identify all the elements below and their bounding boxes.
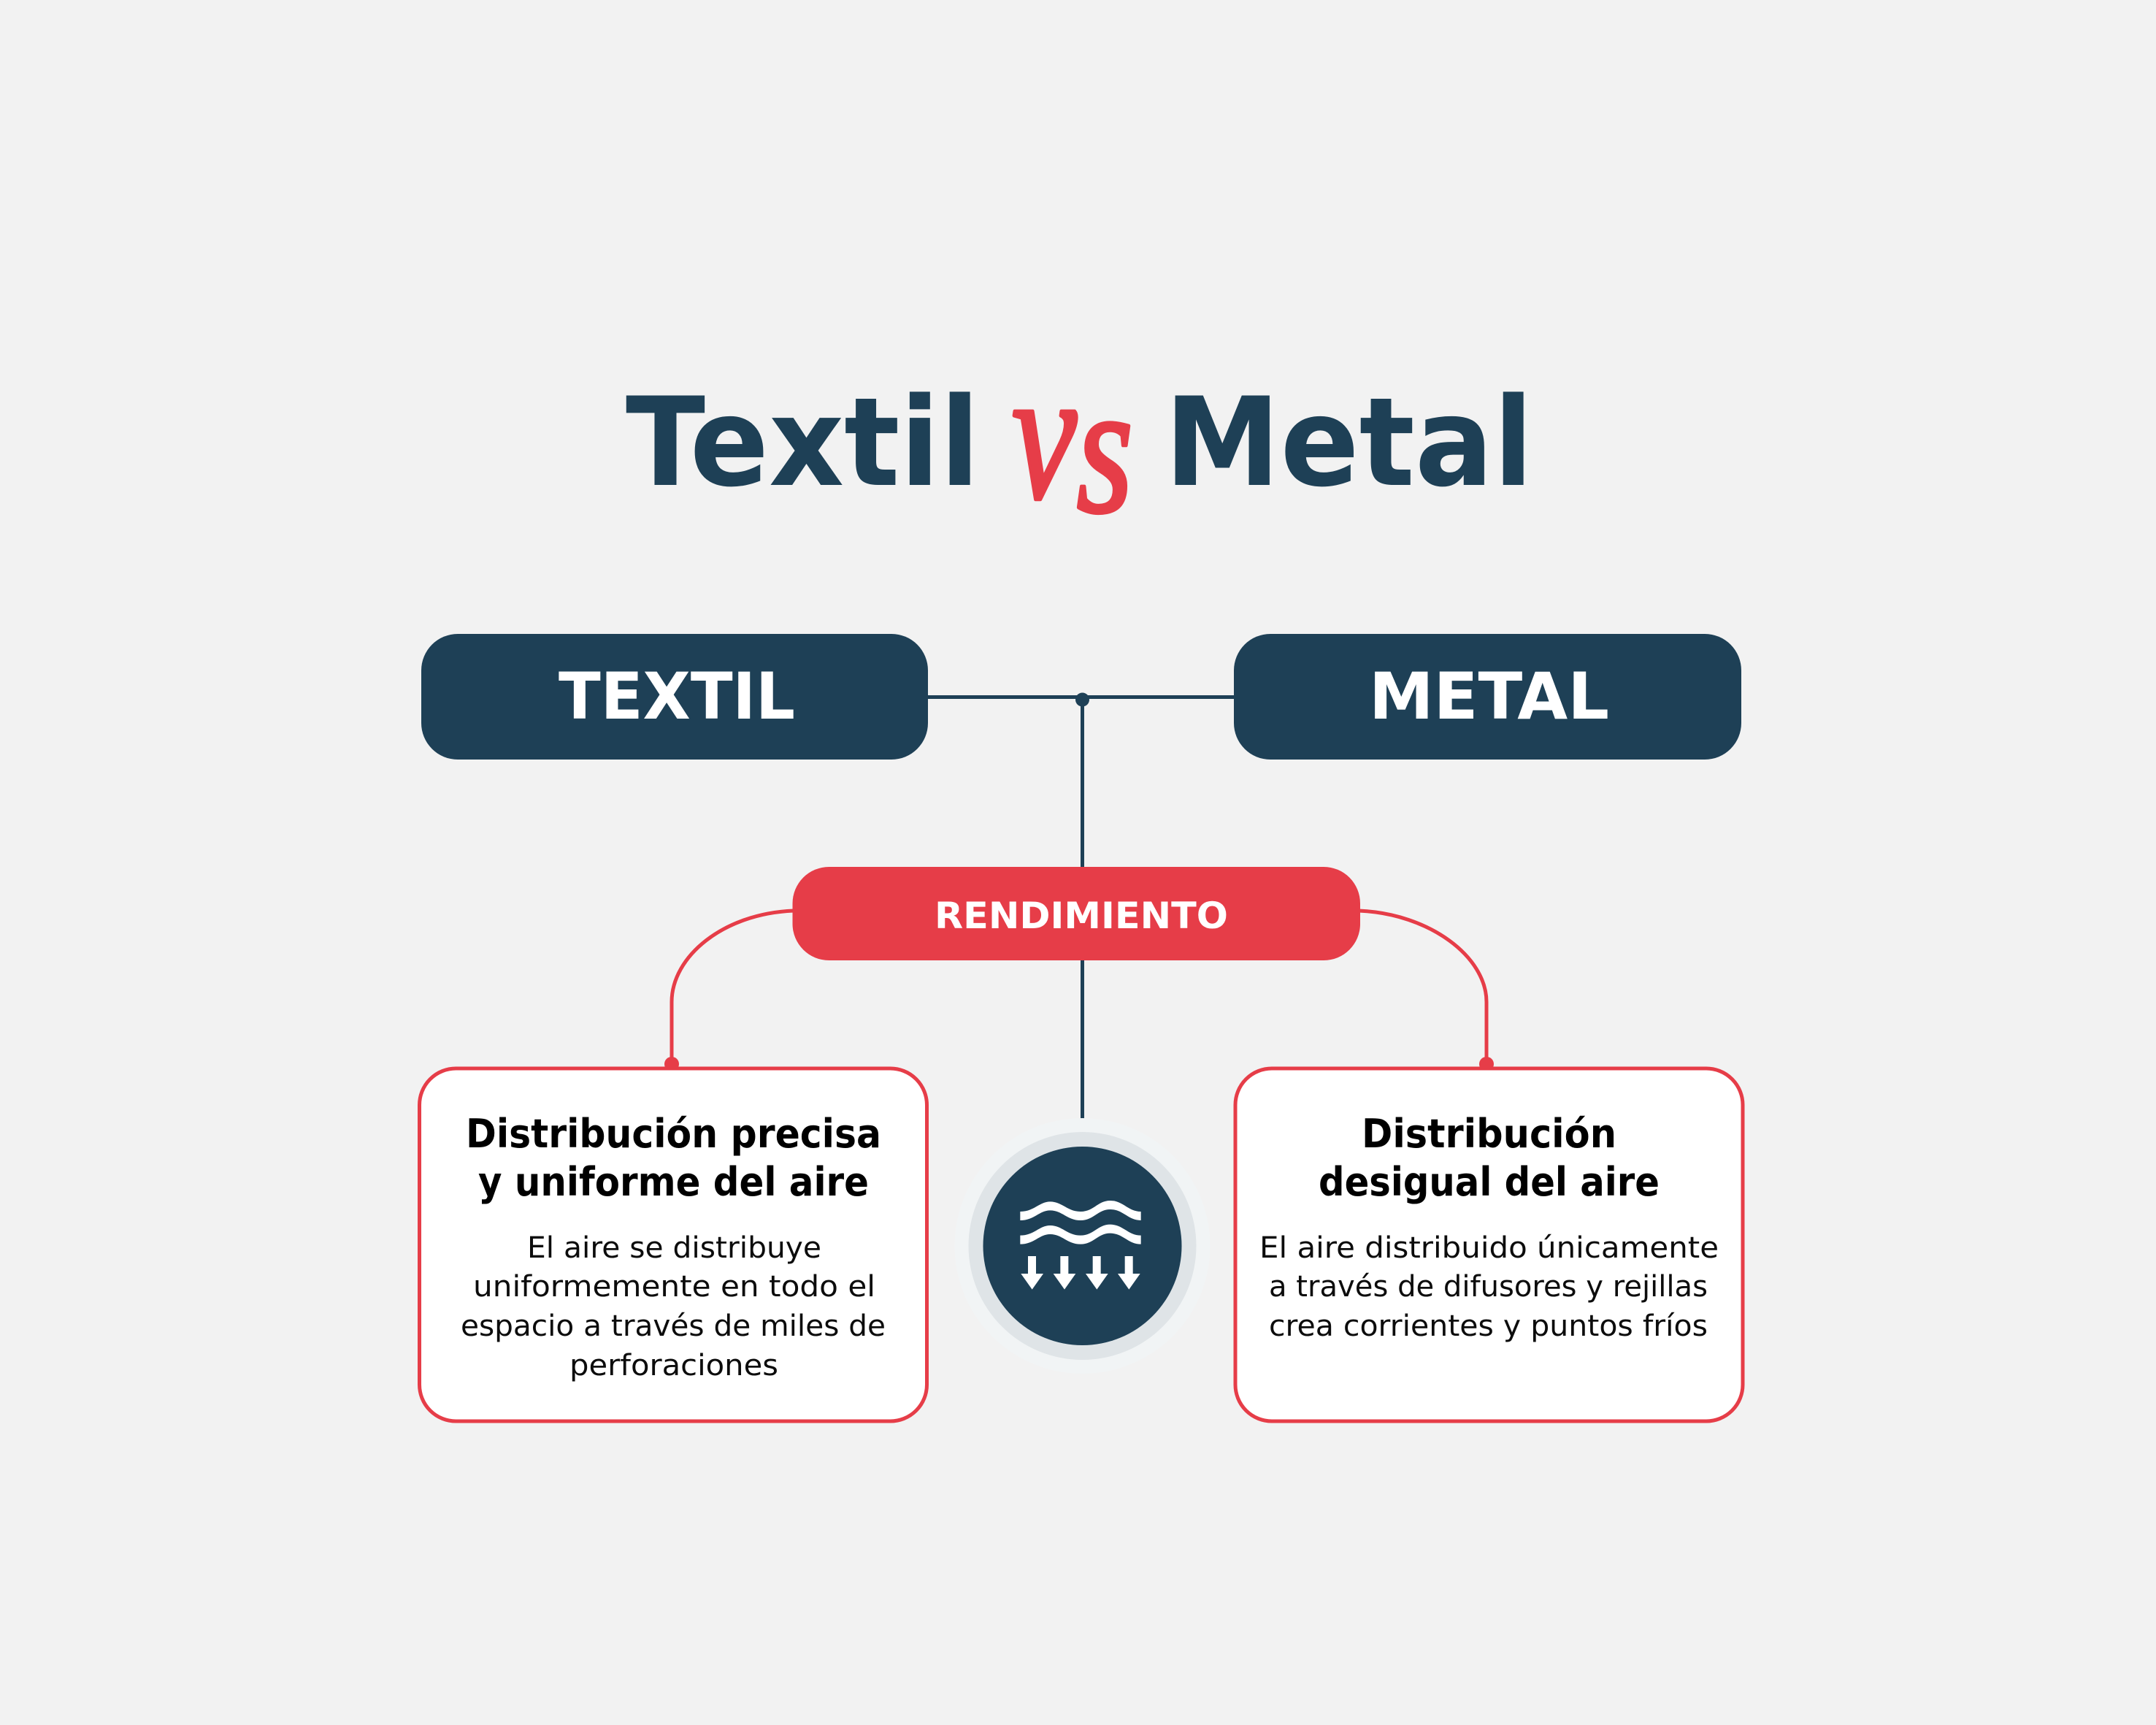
category pill: RENDIMIENTO bbox=[793, 867, 1360, 960]
title word: Metal: Metal bbox=[1165, 371, 1533, 514]
card body text: crea corrientes y puntos fríos bbox=[1269, 1309, 1708, 1343]
connector lines: navy tree bbox=[927, 692, 1235, 1119]
title connector: vs: v bbox=[1012, 330, 1077, 538]
panel: textil card bbox=[419, 1068, 927, 1421]
header pill: METAL bbox=[1234, 634, 1741, 760]
card body text: a través de difusores y rejillas bbox=[1269, 1270, 1708, 1304]
curved connector: left bbox=[664, 911, 794, 1071]
header pill: METAL: METAL bbox=[1369, 659, 1609, 734]
card body text: espacio a través de miles de bbox=[461, 1309, 886, 1343]
card body text bbox=[1259, 1231, 1719, 1343]
card heading: Distribución bbox=[1362, 1111, 1616, 1157]
category pill: RENDIMIENTO: RENDIMIENTO bbox=[935, 895, 1228, 937]
card body text: uniformemente en todo el bbox=[473, 1270, 875, 1304]
curved connector: right bbox=[1359, 911, 1494, 1071]
icon: air waves bbox=[1020, 1201, 1141, 1244]
card body text: El aire distribuido únicamente bbox=[1259, 1231, 1719, 1265]
icon: air flow badge bbox=[955, 1118, 1211, 1374]
card heading bbox=[1319, 1111, 1660, 1205]
card body text: perforaciones bbox=[569, 1349, 778, 1382]
panel: metal card bbox=[1235, 1068, 1743, 1421]
card heading: Distribución precisa bbox=[466, 1111, 881, 1157]
icon: down arrows bbox=[1021, 1256, 1140, 1290]
card heading: y uniforme del aire bbox=[478, 1159, 869, 1205]
card body text bbox=[461, 1231, 886, 1382]
card heading bbox=[466, 1111, 881, 1205]
title connector: vs: s bbox=[1077, 344, 1133, 552]
title bbox=[626, 330, 1533, 552]
header pill: TEXTIL: TEXTIL bbox=[559, 659, 795, 734]
header pill: TEXTIL bbox=[421, 634, 928, 760]
card heading: desigual del aire bbox=[1319, 1159, 1660, 1205]
title word: Textil: Textil bbox=[626, 371, 980, 514]
card body text: El aire se distribuye bbox=[527, 1231, 821, 1265]
